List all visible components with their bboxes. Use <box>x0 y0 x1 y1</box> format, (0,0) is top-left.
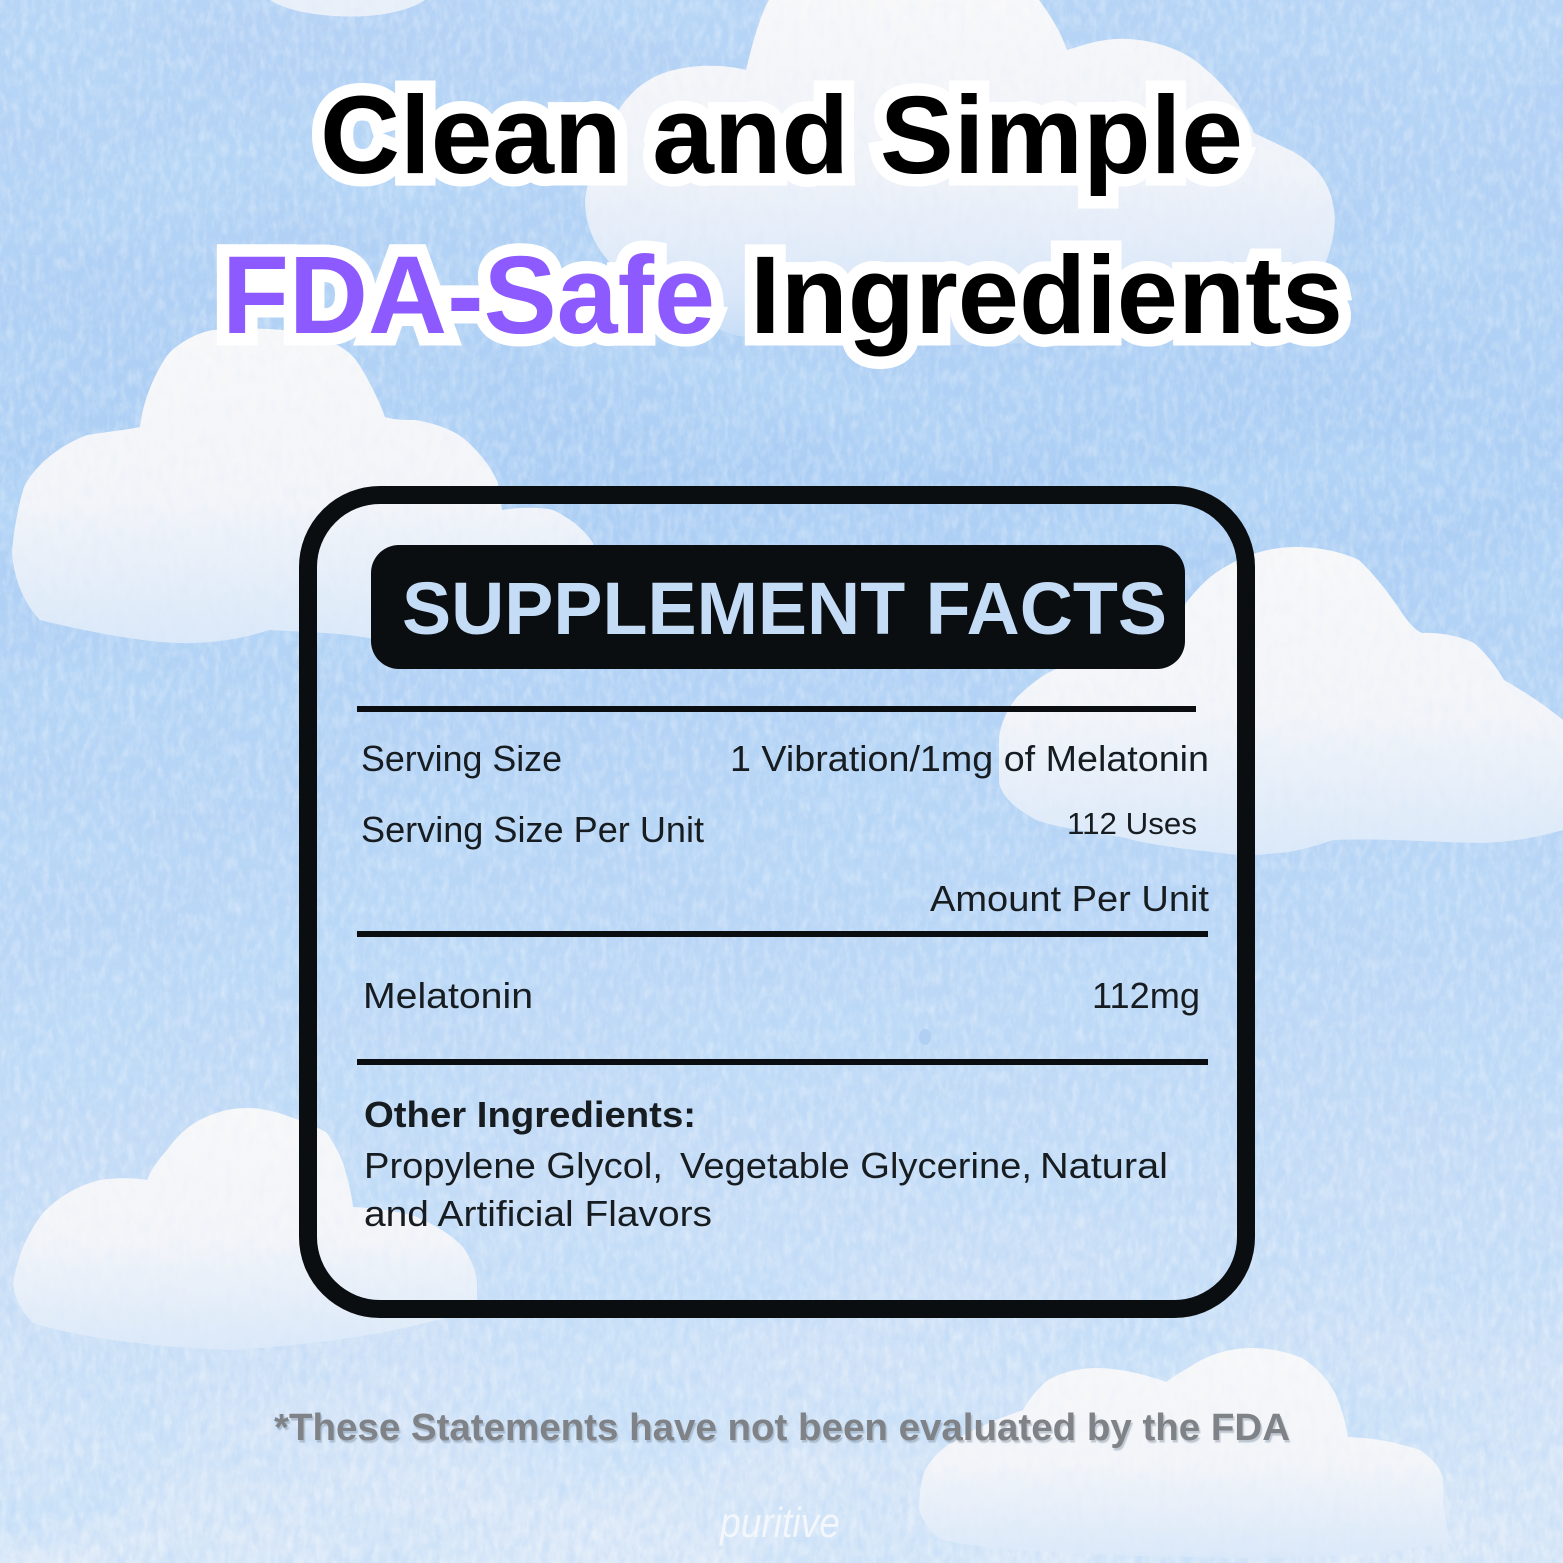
serving size row: 1 Vibration/1mg of Melatonin <box>730 738 1209 779</box>
amount per unit heading: Amount Per Unit <box>930 878 1209 919</box>
servings per unit row: 112 Uses <box>1067 806 1197 841</box>
brand logo: puritive <box>718 1499 840 1546</box>
melatonin row: 112mg <box>1092 975 1200 1016</box>
title line 2: FDA-Safe: FDA-Safe <box>222 234 715 357</box>
panel: supplement facts label <box>308 495 1246 1309</box>
serving size row <box>361 738 1209 779</box>
other ingredients: Other Ingredients: <box>364 1094 696 1135</box>
other ingredients: Propylene Glycol, <box>364 1145 663 1186</box>
title line 1: Clean and Simple <box>320 74 1243 197</box>
servings per unit row <box>361 806 1197 850</box>
melatonin row <box>363 975 1200 1016</box>
title line 2: Ingredients: Ingredients <box>750 234 1343 357</box>
cloud: middle left <box>12 328 600 643</box>
serving size row: Serving Size <box>361 738 562 779</box>
other ingredients: and Artificial Flavors <box>364 1193 712 1234</box>
cloud: lower left <box>13 1108 477 1350</box>
cloud: top left sliver <box>270 0 425 17</box>
servings per unit row: Serving Size Per Unit <box>361 809 704 850</box>
cloud: bottom right <box>919 1348 1450 1558</box>
cloud: middle right <box>999 547 1563 855</box>
cloud: top centre <box>585 0 1335 345</box>
label header: SUPPLEMENT FACTS <box>402 567 1167 650</box>
label header <box>371 545 1185 669</box>
other ingredients <box>364 1094 1168 1234</box>
other ingredients: Vegetable Glycerine, <box>680 1145 1032 1186</box>
divider rules <box>357 706 1208 1065</box>
melatonin row: Melatonin <box>363 975 533 1016</box>
other ingredients: Natural <box>1040 1145 1168 1186</box>
small paint speck <box>919 1029 931 1045</box>
disclaimer: *These Statements have not been evaluated by the FDA <box>274 1407 1290 1449</box>
title <box>222 74 1343 357</box>
label border <box>308 495 1246 1309</box>
